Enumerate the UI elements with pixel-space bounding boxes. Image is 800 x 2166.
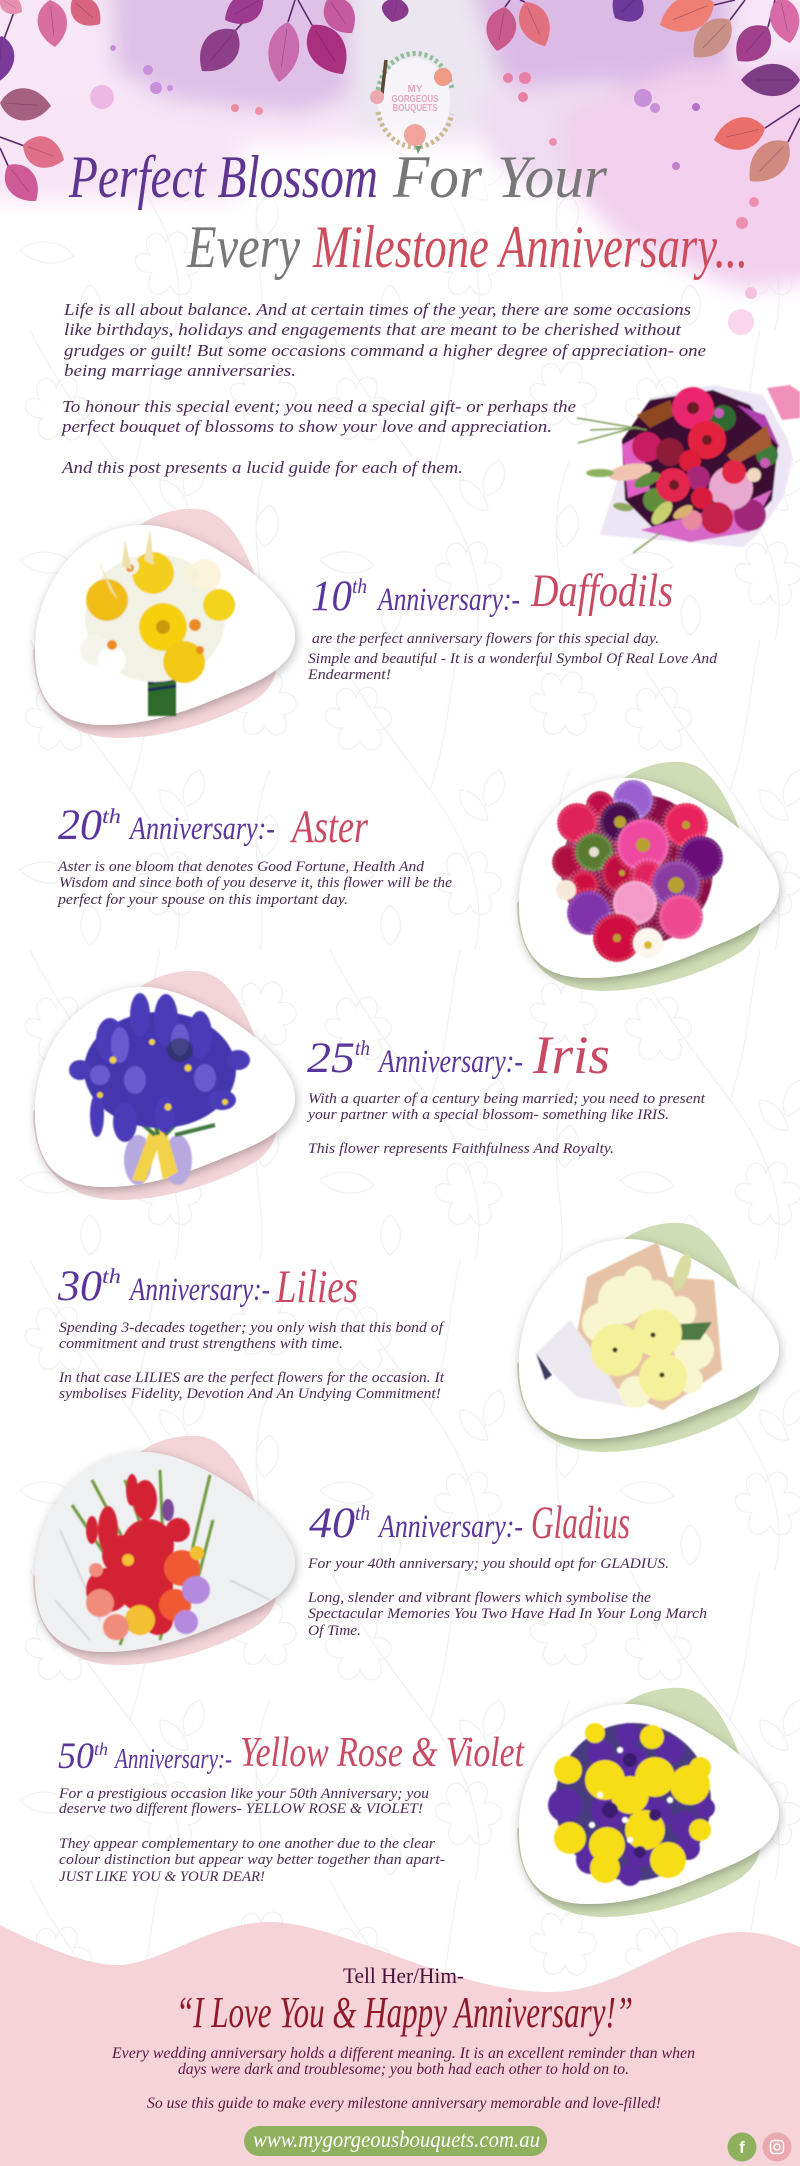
heading: 50th Anniversary Yellow Rose & Violet: 50 [58, 1736, 94, 1777]
heading: 20th Anniversary Aster: 20 [58, 802, 102, 849]
panel: 25th anniversary iris [33, 971, 706, 1200]
heading: 25th Anniversary Iris: Iris [532, 1025, 610, 1085]
logo: My Gorgeous Bouquets wreath: MY [408, 84, 423, 95]
heading: 40th Anniversary Gladius: 40 [309, 1500, 355, 1547]
heading: 30th Anniversary Lilies [57, 1261, 358, 1313]
heading: 25th Anniversary Iris: th [355, 1036, 370, 1060]
text: closing message: days were dark and troublesome; you both had each other to hold on to. [178, 2061, 629, 2078]
intro text: like birthdays, holidays and engagements that are meant to be cherished without [64, 320, 682, 339]
heading: 50th Anniversary Yellow Rose & Violet: Yellow Rose & Violet [240, 1730, 525, 1776]
icon: aster bouquet in green blob [517, 762, 779, 991]
text: iris description: This flower represents Faithfulness And Royalty. [308, 1141, 614, 1157]
heading: 30th Anniversary Lilies: 30 [57, 1263, 102, 1310]
text: rose and violet description: For a prestigious occasion like your 50th Anniversary; you [58, 1786, 429, 1802]
text: aster description [57, 859, 452, 908]
heading: 40th Anniversary Gladius: Gladius [531, 1497, 630, 1549]
panel: footer pink wave [0, 1922, 800, 2166]
text: rose and violet description: They appear complementary to one another due to the clear [59, 1836, 435, 1852]
text: lilies description: Spending 3-decades together; you only wish that this bond of [59, 1320, 445, 1336]
intro text: To honour this special event; you need a special gift- or perhaps the [62, 397, 577, 416]
heading: Tell Her/Him: Tell Her/Him- [343, 1963, 464, 1988]
text: rose and violet description: colour distinction but appear way better together than apart- [59, 1852, 445, 1868]
text: lilies description: commitment and trust strengthens with time. [59, 1336, 343, 1352]
text: rose and violet description [58, 1786, 445, 1885]
heading: 25th Anniversary Iris [307, 1025, 610, 1085]
heading: 20th Anniversary Aster: Anniversary:- [128, 811, 275, 847]
heading: 30th Anniversary Lilies: Lilies [275, 1261, 358, 1313]
logo: My Gorgeous Bouquets wreath [370, 53, 452, 154]
title: Perfect Blossom [68, 144, 378, 210]
text: iris description: your partner with a special blossom- something like IRIS. [306, 1107, 669, 1123]
text: lilies description [58, 1320, 445, 1402]
text: gladius description: Long, slender and vibrant flowers which symbolise the [307, 1590, 651, 1606]
text: gladius description: Spectacular Memories You Two Have Had In Your Long March [308, 1606, 707, 1622]
heading: 20th Anniversary Aster: Aster [290, 801, 369, 853]
title: Every [186, 214, 300, 280]
panel: 50th anniversary yellow rose and violet [58, 1688, 779, 1917]
button: website URL: www.mygorgeousbouquets.com.au [253, 2127, 540, 2152]
heading: 10th Anniversary Daffodils: 10 [311, 573, 352, 620]
heading: 10th Anniversary Daffodils: Anniversary:- [376, 582, 520, 618]
text: gladius description: Of Time. [308, 1623, 361, 1639]
text: daffodils description: Endearment! [307, 667, 391, 683]
icon: iris bouquet in pink blob [33, 971, 295, 1200]
panel: 30th anniversary lilies [57, 1223, 779, 1452]
intro text: grudges or guilt! But some occasions command a higher degree of appreciation- one [64, 341, 707, 360]
text: daffodils description [307, 631, 718, 683]
heading: 20th Anniversary Aster: th [102, 804, 121, 828]
icon: daffodil bouquet in pink blob [33, 509, 295, 738]
title: For Your [392, 144, 608, 210]
intro text: Life is all about balance. And at certain times of the year, there are some occasions [63, 300, 691, 319]
logo: My Gorgeous Bouquets wreath: BOUQUETS [392, 103, 438, 114]
text: iris description: With a quarter of a century being married; you need to present [308, 1091, 706, 1107]
text: aster description: perfect for your spouse on this important day. [57, 892, 348, 908]
icon: lily bouquet in green blob [517, 1223, 779, 1452]
intro text: being marriage anniversaries. [64, 361, 296, 380]
text: daffodils description: Simple and beautiful - It is a wonderful Symbol Of Real Love And [308, 651, 718, 667]
heading: 25th Anniversary Iris: Anniversary:- [377, 1044, 523, 1080]
icon: facebook: f [739, 2138, 745, 2157]
heading: 10th Anniversary Daffodils: th [352, 574, 367, 598]
panel: 20th anniversary aster [57, 762, 779, 991]
heading: 50th Anniversary Yellow Rose & Violet: Anniversary:- [114, 1743, 232, 1775]
text: closing message: So use this guide to make every milestone anniversary memorable and love-filled! [147, 2095, 661, 2112]
title [68, 144, 748, 280]
intro text [61, 300, 707, 477]
panel: 40th anniversary gladius [33, 1436, 707, 1665]
icon: gladiolus bouquet on marble in pink blob [33, 1436, 295, 1665]
heading: 40th Anniversary Gladius: th [355, 1501, 370, 1525]
text: closing message: Every wedding anniversary holds a different meaning. It is an excellent reminder than when [111, 2045, 695, 2062]
heading: 40th Anniversary Gladius: Anniversary:- [377, 1509, 523, 1545]
text: aster description: Wisdom and since both of you deserve it, this flower will be the [59, 875, 452, 891]
heading: 50th Anniversary Yellow Rose & Violet [58, 1730, 525, 1777]
leaves: top border [0, 0, 800, 210]
text: lilies description: symbolises Fidelity, Devotion And An Undying Commitment! [59, 1386, 441, 1402]
text: aster description: Aster is one bloom that denotes Good Fortune, Health And [57, 859, 425, 875]
text: lilies description: In that case LILIES are the perfect flowers for the occasion. It [58, 1370, 445, 1386]
text: rose and violet description: deserve two different flowers- YELLOW ROSE & VIOLET! [59, 1801, 423, 1817]
heading: 10th Anniversary Daffodils [311, 565, 673, 620]
intro bouquet photo [577, 385, 800, 553]
text: daffodils description: are the perfect anniversary flowers for this special day. [312, 631, 659, 647]
text: rose and violet description: JUST LIKE YOU & YOUR DEAR! [59, 1869, 265, 1885]
heading: 25th Anniversary Iris: 25 [307, 1035, 355, 1082]
header watercolor background [0, 0, 800, 335]
icon: facebook [728, 2132, 756, 2162]
heading: 30th Anniversary Lilies: th [102, 1264, 121, 1288]
intro text: And this post presents a lucid guide for each of them. [61, 458, 463, 477]
heading: 20th Anniversary Aster [58, 801, 369, 853]
text: iris description [306, 1091, 706, 1157]
heading: 50th Anniversary Yellow Rose & Violet: th [94, 1739, 108, 1759]
text: gladius description: For your 40th anniversary; you should opt for GLADIUS. [307, 1556, 669, 1572]
icon: yellow rose and violet bouquet in green blob [517, 1688, 779, 1917]
logo: My Gorgeous Bouquets wreath: GORGEOUS [392, 94, 439, 105]
heading: 10th Anniversary Daffodils: Daffodils [530, 565, 673, 617]
heading: 40th Anniversary Gladius [309, 1497, 630, 1549]
intro text: perfect bouquet of blossoms to show your love and appreciation. [61, 417, 552, 436]
icon: instagram [762, 2132, 792, 2162]
panel: 10th anniversary daffodils [33, 509, 718, 738]
text: gladius description [307, 1556, 707, 1639]
heading: 30th Anniversary Lilies: Anniversary:- [128, 1272, 270, 1308]
text: closing message [111, 2045, 695, 2112]
